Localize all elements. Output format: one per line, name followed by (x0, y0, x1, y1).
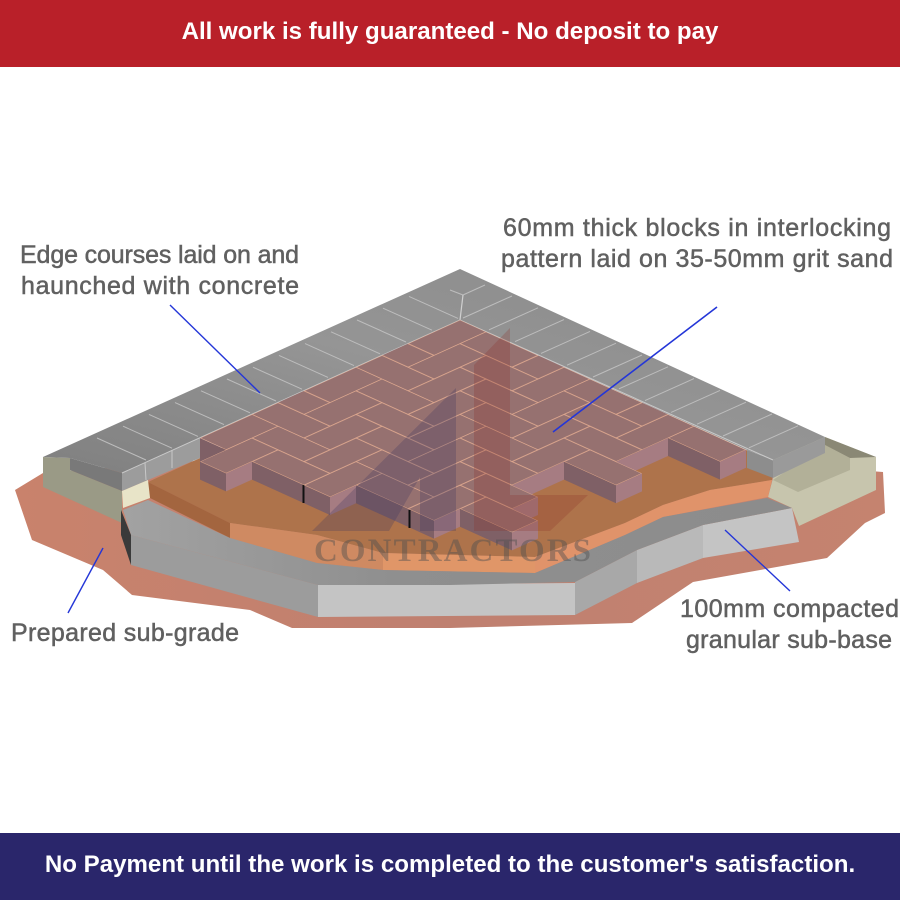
grit sand layer (148, 340, 772, 573)
label: sub-base: granular sub-base (686, 626, 892, 654)
leader line: edge courses (170, 305, 260, 393)
label: edge courses: haunched with concrete (21, 272, 299, 300)
edge concrete haunch: left (43, 457, 122, 523)
bottom banner: No Payment until the work is completed to the customer's satisfaction. (45, 851, 855, 878)
label: sub-grade: Prepared sub-grade (11, 619, 239, 647)
label: interlocking blocks: pattern laid on 35-50mm grit sand (501, 245, 893, 273)
granular sub-base layer (121, 498, 799, 617)
interlocking block top surface (200, 320, 746, 532)
label: edge courses (20, 241, 299, 300)
label: interlocking blocks: 60mm thick blocks in interlocking (503, 214, 891, 242)
leader line: sub-grade (68, 548, 103, 613)
label: sub-base (680, 595, 899, 654)
prepared sub-grade layer (15, 440, 885, 628)
label: edge courses: Edge courses laid on and (20, 241, 299, 269)
label: interlocking blocks (501, 214, 893, 273)
top banner (0, 0, 900, 67)
top banner: All work is fully guaranteed - No deposit to pay (182, 18, 718, 45)
leader line: sub-base (725, 530, 790, 591)
label: sub-base: 100mm compacted (680, 595, 899, 623)
bottom banner (0, 833, 900, 900)
interlocking block sides (200, 438, 746, 550)
logo watermark: CONTRACTORS (314, 533, 591, 569)
leader line: blocks (553, 307, 717, 432)
logo watermark (312, 328, 591, 569)
edge concrete haunch: right (768, 437, 876, 526)
edge course kerb blocks (43, 269, 825, 508)
